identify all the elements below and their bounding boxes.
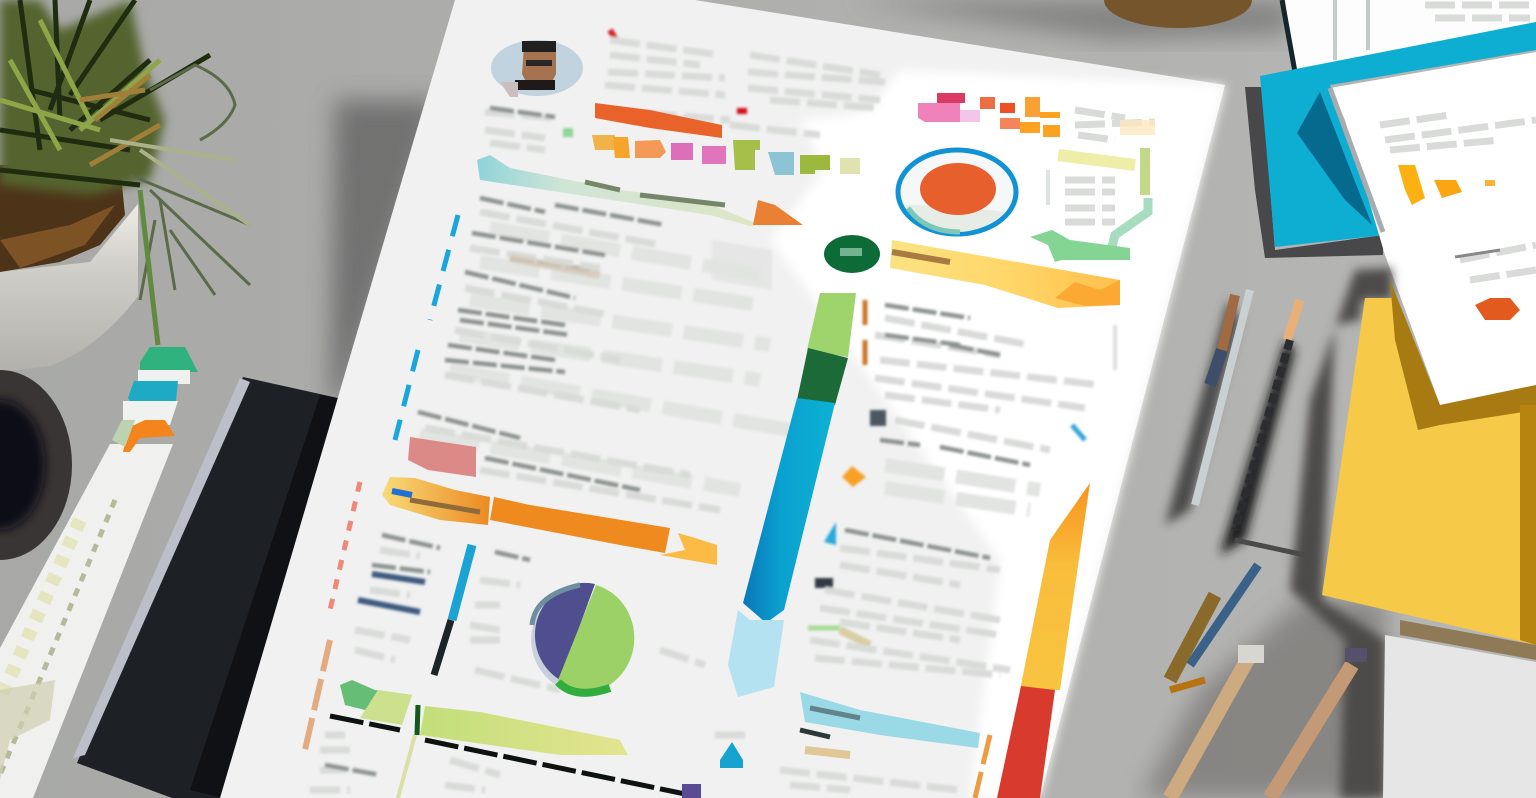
- row of colored squares: [592, 135, 860, 175]
- orange chart bars: [1398, 165, 1425, 205]
- circle badge: [898, 150, 1016, 234]
- tab: green: [140, 347, 198, 372]
- yellow folder: [1322, 280, 1536, 660]
- leaves: [0, 0, 165, 195]
- light blue bottom: [728, 610, 784, 697]
- bright right half of paper: [770, 70, 1225, 798]
- bottom left dashes: [330, 482, 360, 610]
- blue small icon: [824, 522, 836, 545]
- orange arrow tip: [753, 200, 803, 225]
- brown bowl top: [1104, 0, 1252, 28]
- right column text: [808, 300, 1115, 675]
- black dashed rules: [330, 716, 690, 795]
- teal folder: [1260, 22, 1536, 247]
- green circle icon: [824, 235, 880, 273]
- yellow banner: [890, 240, 1120, 308]
- green bottom banner: [330, 680, 701, 798]
- pink box: [408, 437, 476, 477]
- resume paper: [220, 0, 1225, 798]
- pencil right: [1270, 665, 1352, 798]
- purple tip: [682, 784, 701, 798]
- green top: [807, 293, 856, 357]
- red block: [997, 686, 1055, 798]
- pen 3 blue: [1190, 565, 1258, 665]
- left column text: [418, 198, 790, 510]
- dark bowl: [0, 370, 72, 560]
- orange arrow: [660, 533, 717, 565]
- white paper lower right: [1383, 635, 1536, 798]
- pencil left: [1170, 655, 1250, 798]
- tab: orange: [123, 420, 175, 452]
- blue vertical column: [728, 293, 856, 697]
- tab: white lower: [123, 401, 178, 425]
- ruler strip with tabs: [0, 347, 198, 798]
- tab: white: [138, 370, 190, 384]
- orange pill: [1475, 298, 1520, 320]
- green teal banner: [477, 155, 803, 226]
- orange center: [920, 163, 996, 215]
- lime banner: [420, 706, 628, 755]
- white sheet right: [1330, 52, 1536, 405]
- left dashed blue rule: [395, 215, 458, 440]
- soil: [0, 165, 125, 272]
- yellow orange right column: [1020, 483, 1090, 690]
- tab: teal: [128, 381, 178, 410]
- pen 1: [1195, 290, 1250, 505]
- light blue banner: [800, 692, 990, 798]
- blue drop icon: [720, 742, 743, 768]
- orange bar: [490, 497, 670, 553]
- dark block beside yellow folder: [1290, 268, 1392, 798]
- green arc arrow: [1030, 148, 1150, 262]
- orange small icon: [842, 466, 866, 487]
- dark green: [797, 348, 848, 405]
- top right white page: [1282, 0, 1536, 72]
- pens: [1165, 290, 1367, 798]
- pie chart: [531, 583, 634, 693]
- header text blocks: [485, 30, 885, 150]
- pen 2: [1287, 300, 1300, 340]
- orange title bar: [595, 103, 722, 138]
- blue to black rule: [452, 545, 472, 620]
- pen shadows: [1165, 300, 1240, 525]
- mini table text: [355, 535, 705, 690]
- top right colourful icon blocks: [918, 93, 1155, 140]
- bottom text: [310, 735, 960, 790]
- black notebook: [73, 377, 347, 798]
- dark shadow under folder: [1245, 87, 1383, 258]
- blue body: [743, 398, 835, 623]
- plant pot: [0, 204, 138, 372]
- avatar photo: [491, 40, 583, 97]
- dark small icon: [870, 410, 886, 426]
- yellow orange banner: [382, 477, 717, 565]
- potted plant: [0, 0, 250, 372]
